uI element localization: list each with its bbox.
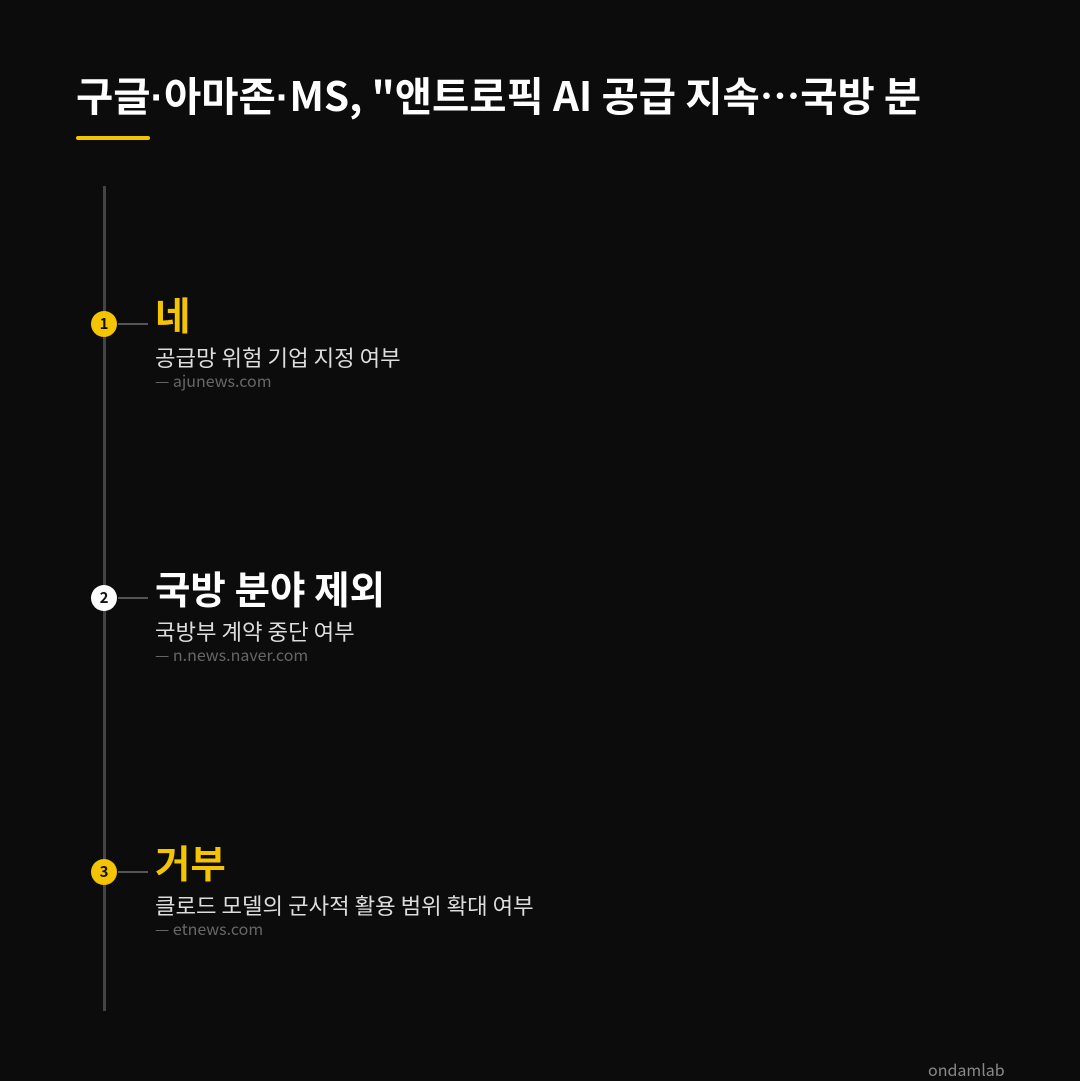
item 1 <box>91 286 401 392</box>
source 2: — n.news.naver.com <box>155 642 308 666</box>
item 3 <box>91 834 534 940</box>
marker 3: 3 <box>100 861 108 882</box>
heading 1: 네 <box>155 286 190 342</box>
marker 2 <box>91 585 117 611</box>
item 2 <box>91 560 385 666</box>
source 1: — ajunews.com <box>155 368 272 392</box>
source 3: — etnews.com <box>155 916 263 940</box>
desc 2: 국방부 계약 중단 여부 <box>155 615 355 647</box>
marker 2: 2 <box>100 587 108 608</box>
title: 구글·아마존·MS, "앤트로픽 AI 공급 지속…국방 분 <box>76 64 921 123</box>
title underline <box>76 136 150 140</box>
heading 2: 국방 분야 제외 <box>155 560 385 616</box>
marker 1: 1 <box>100 313 108 334</box>
footer brand: ondamlab <box>928 1057 1005 1081</box>
desc 3: 클로드 모델의 군사적 활용 범위 확대 여부 <box>155 889 534 921</box>
marker 1 <box>91 311 117 337</box>
heading 3: 거부 <box>155 834 226 890</box>
desc 1: 공급망 위험 기업 지정 여부 <box>155 341 401 373</box>
marker 3 <box>91 859 117 885</box>
timeline line <box>103 186 106 1011</box>
